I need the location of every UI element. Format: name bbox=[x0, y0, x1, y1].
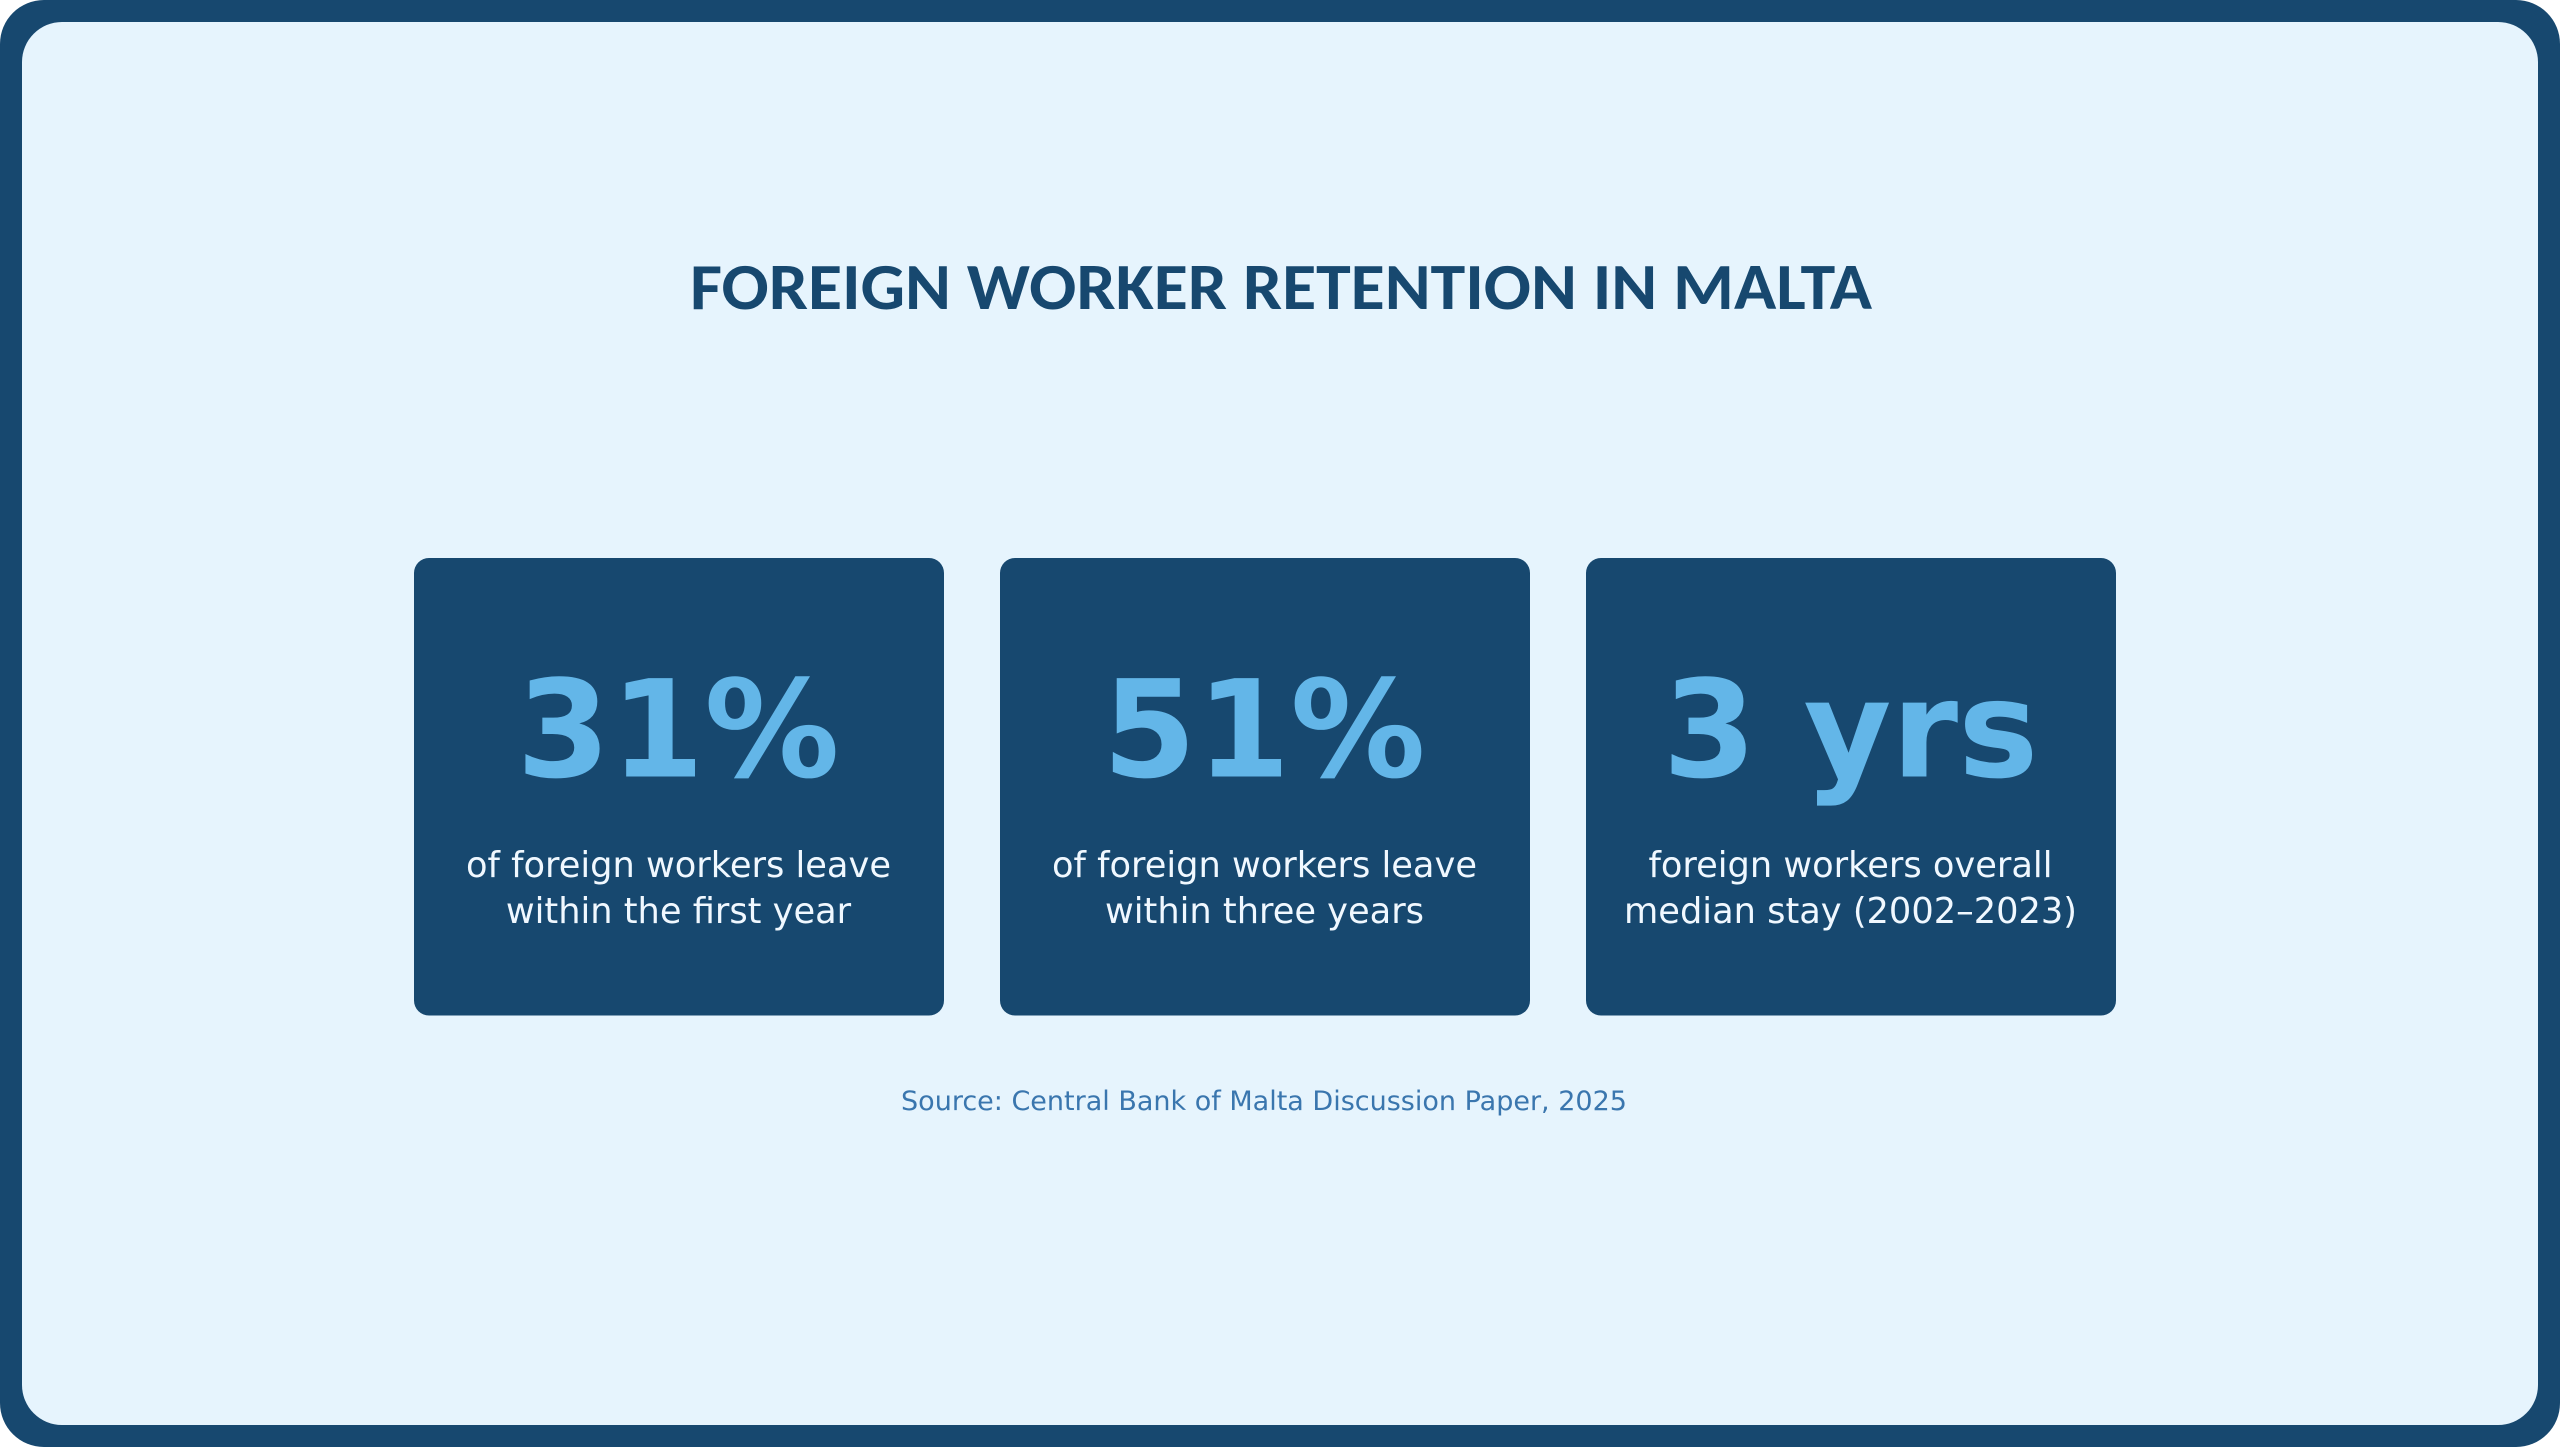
stat description: median stay: foreign workers overall bbox=[1649, 845, 2052, 886]
stat value: 3 yrs: 3 yrs bbox=[1663, 652, 2038, 808]
stat description: three years: of foreign workers leave bbox=[1052, 845, 1477, 886]
panel: median stay stat bbox=[1586, 558, 2116, 1016]
stat value: 51%: 51% bbox=[1102, 652, 1426, 808]
source note: Source: Central Bank of Malta Discussion Paper, 2025 bbox=[901, 1086, 1627, 1117]
stat description: first year: of foreign workers leave bbox=[466, 845, 891, 886]
panel: three-year stat bbox=[1000, 558, 1530, 1016]
stat description: three years: within three years bbox=[1105, 891, 1424, 932]
stat description: median stay: median stay (2002–2023) bbox=[1624, 891, 2077, 932]
title: FOREIGN WORKER RETENTION IN MALTA bbox=[690, 246, 1872, 327]
panel: first-year stat bbox=[414, 558, 944, 1016]
stat value: 31%: 31% bbox=[516, 652, 840, 808]
stat description: first year: within the first year bbox=[506, 891, 852, 932]
